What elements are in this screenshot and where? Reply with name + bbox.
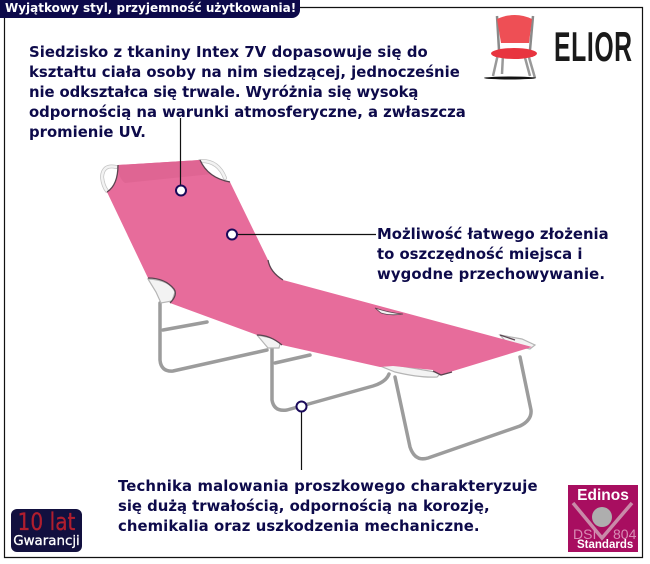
tube corners (102, 161, 225, 191)
leg frames (160, 303, 531, 459)
text: folding description: to oszczędność miejsca i (377, 245, 582, 263)
text: fabric description: odpornością na warunki atmosferyczne, a zwłaszcza (29, 103, 466, 121)
warranty label: Gwarancji (13, 534, 80, 549)
badge number: 804 (613, 526, 636, 542)
callout line: folding (227, 230, 376, 240)
fabric side tab (375, 308, 403, 315)
text: folding description (377, 225, 609, 283)
badge code: DSI (573, 526, 596, 542)
badge: Edinos standards (568, 485, 638, 552)
text: fabric description (29, 43, 466, 141)
callout line: fabric (176, 118, 186, 196)
text: fabric description: kształtu ciała osoby na nim siedzącej, jednocześnie (29, 63, 460, 81)
text: coating description: Technika malowania proszkowego charakteryzuje (118, 477, 538, 495)
logo wordmark: ELIOR (554, 23, 633, 70)
header banner: Wyjątkowy styl, przyjemność użytkowania! (5, 1, 296, 15)
badge footer: Standards (577, 539, 633, 551)
text: fabric description: nie odkształca się trwale. Wyróżnia się wysoką (29, 83, 418, 101)
text: coating description: się dużą trwałością, odpornością na korozję, (118, 497, 490, 515)
text: fabric description: promienie UV. (29, 123, 146, 141)
text: fabric description: Siedzisko z tkaniny Intex 7V dopasowuje się do (29, 43, 428, 61)
text: folding description: wygodne przechowywanie. (377, 265, 605, 283)
badge: 10-year warranty (11, 509, 82, 552)
warranty years: 10 lat (18, 508, 75, 536)
text: coating description (118, 477, 538, 535)
badge name: Edinos (577, 487, 629, 504)
text: folding description: Możliwość łatwego złożenia (377, 225, 609, 243)
callout line: coating (296, 402, 306, 470)
text: coating description: chemikalia oraz uszkodzenia mechaniczne. (118, 517, 480, 535)
icon: red chair (484, 15, 537, 80)
fabric hems (107, 160, 515, 375)
fabric (107, 160, 532, 375)
